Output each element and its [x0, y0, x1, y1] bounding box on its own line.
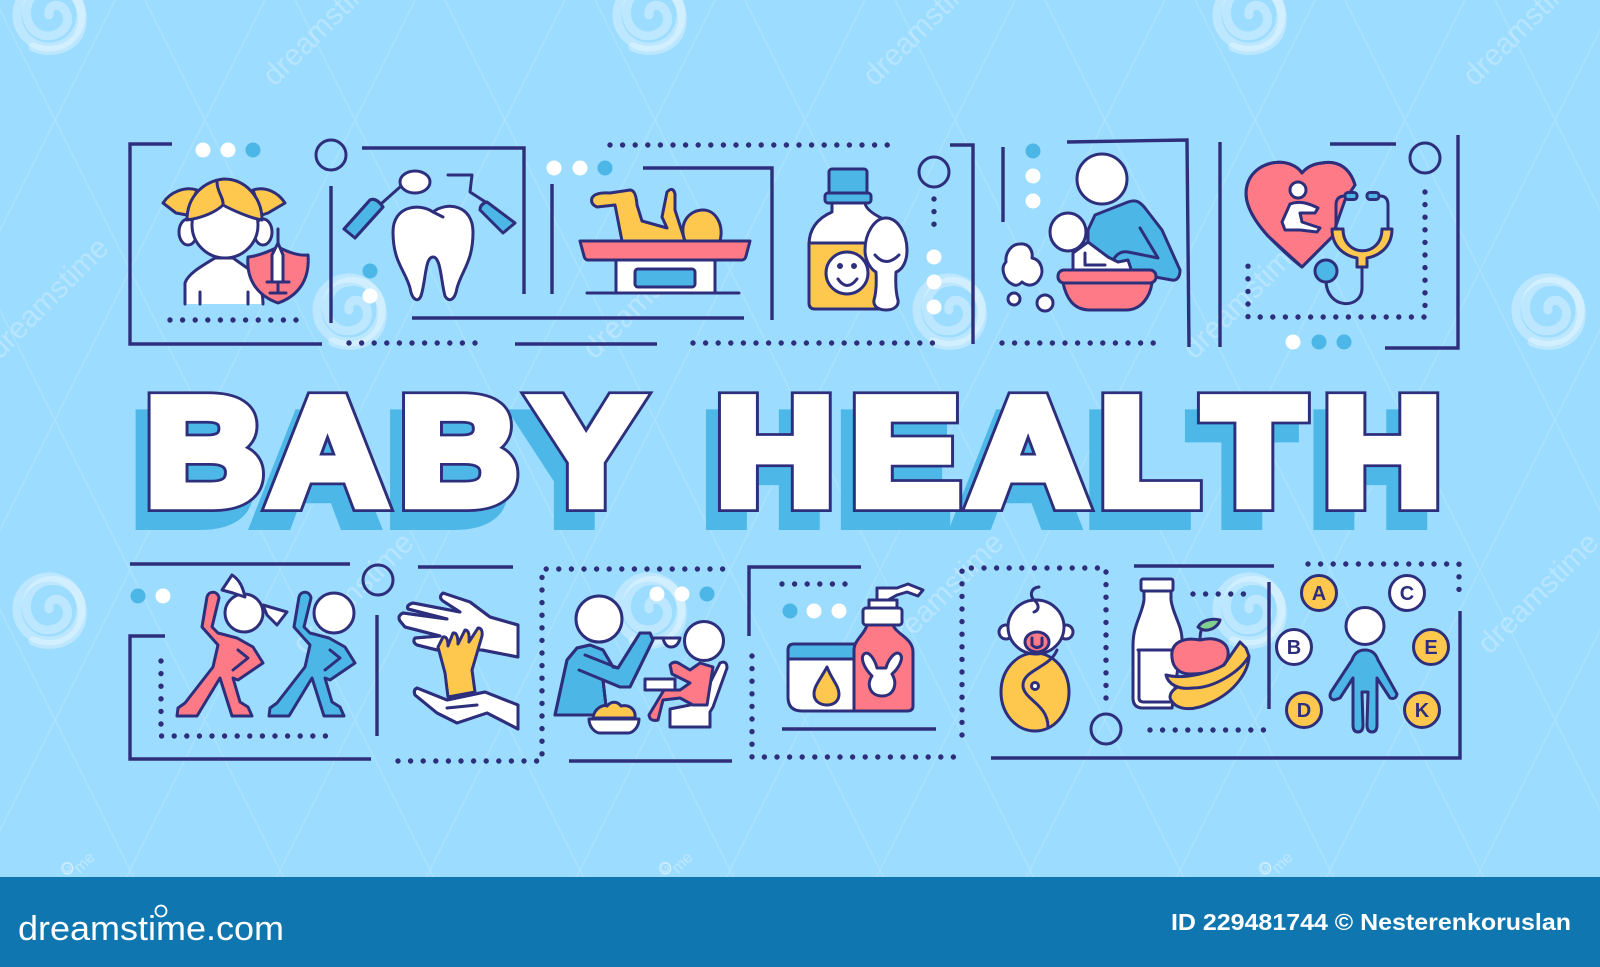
- bottom row frames and dots: [130, 564, 1460, 761]
- icon: adult hands holding baby hand: [399, 593, 518, 729]
- footer logo: dreamstime.com: [18, 910, 284, 948]
- icon: milk bottle, apple and bananas: [1133, 579, 1249, 709]
- icon: adult feeding baby in high chair: [555, 596, 727, 733]
- icon: baby cream jar and pump bottle: [788, 584, 923, 711]
- icon: person with vitamins A B C D E K: A: [1312, 583, 1326, 605]
- title shadow: BABY: [133, 385, 629, 555]
- icon: mother bathing baby: [1003, 154, 1180, 311]
- title: BABY HEALTH: HEALTH: [716, 367, 1442, 537]
- icon: swaddled newborn: [999, 587, 1073, 731]
- icon: girl with vaccine shield: [163, 179, 308, 304]
- watermark spirals and text: dreamstime: [576, 231, 710, 365]
- icon: person with vitamins A B C D E K: E: [1424, 637, 1438, 659]
- icon: children exercising: [177, 575, 355, 716]
- icon: person with vitamins A B C D E K: B: [1287, 637, 1301, 659]
- title: BABY HEALTH: BABY: [145, 367, 641, 537]
- icon: person with vitamins A B C D E K: K: [1415, 700, 1430, 722]
- watermark spirals and text: dreamstime: [876, 526, 1010, 660]
- title shadow: [133, 385, 1430, 555]
- title shadow: HEALTH: [704, 385, 1430, 555]
- top row frames and dots: [130, 135, 1458, 350]
- icon: person with vitamins A B C D E K: C: [1400, 583, 1414, 605]
- title: BABY HEALTH: BABY: [145, 367, 641, 537]
- watermark spirals and text: me: [1269, 849, 1297, 877]
- icon: medicine bottle and spoon: [809, 169, 907, 310]
- footer credit: ID 229481744 © Nesterenkoruslan: [1171, 909, 1571, 935]
- icon: heart with baby and stethoscope: [1246, 162, 1392, 304]
- icon: tooth with dental tools: [344, 171, 515, 300]
- icon: person with vitamins A B C D E K: D: [1297, 700, 1311, 722]
- watermark spirals and text: dreamstime: [1176, 231, 1310, 365]
- icon: person with vitamins A B C D E K: [1276, 576, 1448, 732]
- watermark spirals and text: me: [71, 849, 99, 877]
- footer bar: [0, 877, 1600, 967]
- title: BABY HEALTH: [145, 367, 1442, 537]
- watermark spirals and text: dreamstime: [286, 526, 420, 660]
- icon: baby on weighing scale: [580, 189, 750, 293]
- title: BABY HEALTH: HEALTH: [716, 367, 1442, 537]
- watermark spirals and text: me: [669, 849, 697, 877]
